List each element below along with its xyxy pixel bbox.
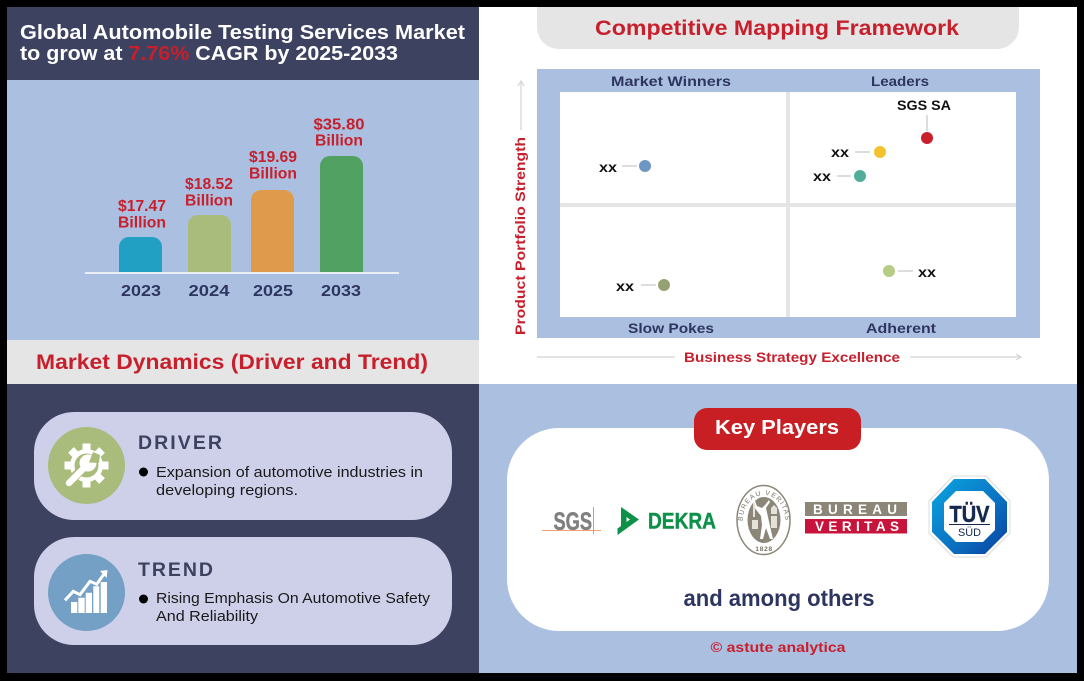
- logo: TUV SUD: TÜV: [950, 501, 990, 527]
- bar 2025: 2025: [253, 283, 293, 300]
- panel: driver and trend: [7, 384, 479, 673]
- heading: competitive mapping framework: Competitive Mapping Framework: [595, 17, 959, 40]
- bar 2025: Billion: [249, 166, 297, 182]
- card: trend: [34, 537, 452, 645]
- point: market winners: xx: [599, 159, 617, 175]
- quadrant matrix: Slow Pokes: [628, 320, 714, 336]
- logo: Bureau Veritas seal: 1828: [755, 546, 773, 553]
- bar 2033: $35.80: [314, 116, 364, 134]
- panel: key players: [479, 384, 1077, 673]
- icon: growth chart: [48, 554, 125, 631]
- card: driver: DRIVER: [138, 432, 222, 454]
- bar 2033: Billion: [315, 132, 363, 150]
- card: driver: Expansion of automotive industries in: [156, 464, 423, 481]
- logo: DEKRA: DEKRA: [648, 508, 716, 534]
- heading: market dynamics: [7, 340, 479, 384]
- point: SGS SA: SGS SA: [897, 97, 951, 113]
- point: adherent: xx: [918, 264, 936, 280]
- bar 2024: Billion: [185, 192, 233, 210]
- bar 2025: [249, 149, 297, 300]
- bar 2025: $19.69: [249, 149, 297, 166]
- card: trend: And Reliability: [156, 608, 259, 625]
- point: slow pokes: xx: [616, 278, 634, 294]
- bar 2033: [314, 116, 364, 300]
- point: adherent: [883, 264, 936, 280]
- bar 2023: [118, 198, 166, 300]
- bar 2024: [185, 176, 233, 300]
- logo: Bureau Veritas seal: BUREAU VERITAS: [738, 490, 790, 521]
- text: and among others: and among others: [684, 585, 874, 611]
- icon: gear and wrench: [48, 427, 125, 504]
- logo: TUV SUD: SÜD: [958, 527, 981, 539]
- quadrant matrix: Adherent: [866, 320, 936, 336]
- x axis: Business Strategy Excellence: [684, 349, 900, 365]
- card: trend: TREND: [138, 559, 213, 581]
- quadrant matrix: [537, 69, 1040, 338]
- logo: TUV SUD: [929, 476, 1010, 557]
- point: SGS SA: [897, 97, 951, 144]
- quadrant matrix: Leaders: [871, 73, 929, 89]
- heading: competitive mapping framework: [537, 7, 1019, 49]
- point: leaders teal: xx: [813, 168, 831, 184]
- logo: Bureau Veritas wordmark: BUREAU: [813, 502, 897, 517]
- title: to grow at 7.76% CAGR by 2025-2033: [20, 43, 398, 65]
- heading: market dynamics: Market Dynamics (Driver and Trend): [36, 351, 428, 374]
- bar 2023: $17.47: [118, 198, 166, 215]
- title: Global Automobile Testing Services Market: [20, 22, 465, 44]
- point: leaders teal: [813, 168, 866, 184]
- bar 2033: 2033: [321, 283, 361, 300]
- title: [7, 7, 479, 80]
- logo: Bureau Veritas wordmark: VERITAS: [815, 519, 899, 534]
- bar chart: [85, 116, 399, 300]
- card: driver: developing regions.: [156, 482, 298, 499]
- card: driver: [34, 412, 452, 520]
- point: market winners: [599, 159, 651, 175]
- logo: SGS: SGS: [554, 508, 592, 536]
- y axis: Product Portfolio Strength: [512, 137, 528, 335]
- y axis: [512, 81, 528, 335]
- bar 2023: Billion: [118, 214, 166, 232]
- logo: Bureau Veritas seal: [736, 484, 791, 556]
- logo: DEKRA: [618, 507, 716, 535]
- quadrant matrix: Market Winners: [611, 73, 731, 89]
- bar 2024: 2024: [188, 283, 230, 300]
- credit: © astute analytica: [710, 640, 846, 655]
- heading: key players: [694, 408, 861, 450]
- card: trend: Rising Emphasis On Automotive Safety: [156, 590, 431, 607]
- bar 2023: 2023: [121, 283, 161, 300]
- point: slow pokes: [616, 278, 670, 294]
- point: leaders yellow: [831, 144, 886, 160]
- point: leaders yellow: xx: [831, 144, 849, 160]
- panel: market size: [7, 7, 479, 340]
- logo: Bureau Veritas wordmark: [805, 502, 907, 534]
- x axis: [537, 349, 1021, 365]
- panel: competitive mapping: [479, 7, 1077, 384]
- bar 2024: $18.52: [185, 176, 233, 193]
- heading: key players: Key Players: [715, 417, 839, 439]
